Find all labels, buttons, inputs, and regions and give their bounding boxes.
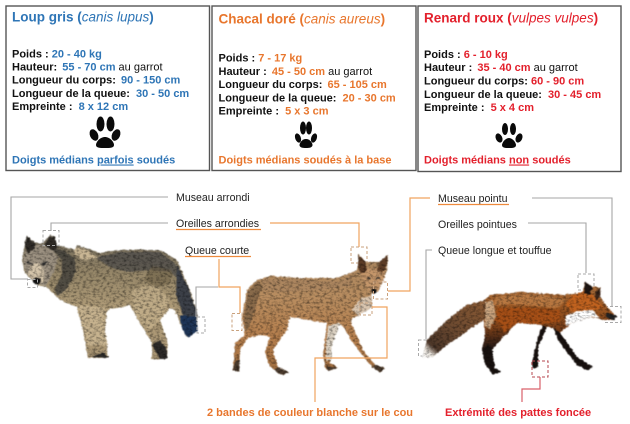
label: museau arrondi [11,192,250,288]
label: museau pointu [374,193,621,322]
illustration: renard [422,282,617,374]
text: doigts du renard: Doigts médians non soudés [424,154,571,166]
label: oreilles arrondies: Oreilles arrondies [176,218,259,230]
text block: mesures du renard: Poids : 6 - 10 kg [424,49,508,61]
icon: empreinte du chacal [294,122,318,148]
label: oreilles pointues [438,219,594,290]
label: queue courte: Queue courte [185,245,249,257]
label: museau arrondi: Museau arrondi [176,192,250,204]
illustration: loup [22,235,198,359]
label: oreilles pointues: Oreilles pointues [438,219,517,231]
heading: loup gris: Loup gris (canis lupus) [12,10,154,24]
label: oreilles arrondies [43,218,367,263]
label: queue courte [185,245,251,333]
panel: chacal doré [212,6,416,170]
icon: empreinte du loup [88,116,122,148]
label: bandes blanches [207,303,413,419]
icon: empreinte du renard [494,123,524,148]
text block: mesures du chacal: Poids : 7 - 17 kg [218,52,302,64]
panel: loup gris [6,6,210,170]
text block: mesures du loup: Hauteur: 55 - 70 cm au garrot [12,62,163,74]
text block: mesures du chacal: Hauteur : 45 - 50 cm au garrot [218,66,372,78]
text block: mesures du renard [424,49,601,114]
text: doigts du loup: Doigts médians parfois soudés [12,154,175,166]
text block: mesures du loup: Longueur de la queue: 30 - 50 cm [12,88,189,100]
label: extrémité des pattes [445,361,591,419]
label: bandes blanches: 2 bandes de couleur blanche sur le cou [207,407,413,419]
heading: renard roux: Renard roux (vulpes vulpes) [424,10,598,26]
text block: mesures du renard: Longueur du corps: 60 - 90 cm [424,76,584,88]
illustration: chacal [233,254,388,375]
text block: mesures du loup: Empreinte : 8 x 12 cm [12,101,128,113]
panel: renard roux [418,6,621,172]
label: queue longue et touffue [418,245,552,356]
text block: mesures du loup: Poids : 20 - 40 kg [12,48,102,60]
text block: mesures du chacal [218,52,396,118]
text block: mesures du loup [12,48,189,113]
text block: mesures du renard: Empreinte : 5 x 4 cm [424,102,534,114]
label: extrémité des pattes: Extrémité des pattes foncée [445,407,591,419]
text block: mesures du chacal: Longueur de la queue: 20 - 30 cm [218,92,396,104]
text block: mesures du renard: Hauteur : 35 - 40 cm au garrot [424,62,578,74]
label: queue longue et touffue: Queue longue et touffue [438,245,552,257]
text: doigts du chacal: Doigts médians soudés à la base [218,154,392,166]
text block: mesures du chacal: Empreinte : 5 x 3 cm [218,106,329,118]
label: museau pointu: Museau pointu [438,193,508,205]
text block: mesures du renard: Longueur de la queue: 30 - 45 cm [424,89,601,101]
heading: chacal doré: Chacal doré (canis aureus) [218,12,385,26]
text block: mesures du loup: Longueur du corps: 90 - 150 cm [12,74,180,86]
text block: mesures du chacal: Longueur du corps: 65 - 105 cm [218,79,387,91]
